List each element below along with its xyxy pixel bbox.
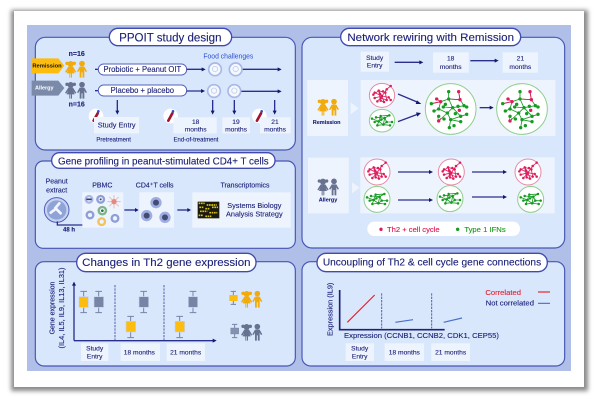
heading: Gene profiling (52, 153, 275, 168)
time point: 18 months: 18 (192, 119, 200, 126)
icon: remission children (65, 61, 87, 78)
label: 21 months (167, 343, 205, 361)
group: Remission: Remission (313, 120, 341, 126)
network legend (367, 222, 520, 236)
time point: 18 months: months (185, 127, 207, 134)
time point: 19 months (222, 117, 250, 134)
heading: food challenges: Food challenges (203, 54, 254, 61)
panel: Gene profiling (35, 153, 295, 248)
label: 21 months: 21 months (435, 350, 467, 357)
label: PBMC: PBMC (92, 182, 112, 189)
tag: Remission (32, 58, 64, 73)
network legend: Type 1 IFNs (464, 225, 506, 234)
time point: 19 months: 19 (232, 119, 240, 126)
x axis label: Expression (CCNB1, CCNB2, CDK1, CEP55) (344, 331, 499, 340)
box plots: study entry (79, 291, 104, 313)
IFN network nodes (367, 193, 541, 204)
pointer triangle (352, 182, 360, 193)
food challenge icons (208, 63, 242, 97)
IFN networks (364, 186, 544, 212)
timeline arrow: upper arm (187, 67, 282, 71)
icon: peanut extract dish (44, 198, 69, 222)
tag: Allergy (32, 81, 64, 96)
down arrows to sampling time points (115, 100, 277, 115)
arm: placebo (95, 85, 187, 96)
arm: probiotic and peanut OIT: Probiotic + Peanut OIT (103, 65, 181, 74)
converging arrows (398, 94, 421, 122)
pointer triangle (351, 102, 359, 114)
time point: 18 months (173, 117, 217, 134)
label: Peanut extract (46, 179, 68, 195)
timeline arrow: lower arm (187, 89, 282, 93)
label: 18 months (385, 343, 424, 361)
infographic content (27, 25, 571, 371)
not correlated lines (395, 318, 462, 322)
label: Study Entry: Entry (352, 354, 368, 361)
allergy network row (308, 157, 555, 236)
legend: correlated (485, 288, 550, 297)
heading: Network rewiring with Remission: Network rewiring with Remission (347, 32, 514, 44)
arrow between networks (480, 106, 494, 110)
legend: allergy (231, 324, 262, 341)
time point: 21 months (503, 52, 538, 73)
transcriptomics box (192, 192, 291, 228)
time point: 21 months: months (509, 64, 532, 71)
heading: Changes in Th2 gene expression (77, 253, 256, 272)
time point: 21 months (260, 117, 291, 134)
allergy network panel (360, 157, 555, 213)
y axis label: Gene expression (50, 281, 57, 334)
time point: 18 months (433, 52, 469, 73)
label: Peanut extract: Peanut (46, 179, 68, 186)
arm: placebo: Placebo + placebo (111, 86, 175, 95)
time point: Study Entry (361, 52, 389, 72)
CD4 T cells (139, 192, 174, 228)
sample size: remission: n=16 (69, 51, 85, 58)
time point: Study Entry: Study Entry (98, 121, 136, 130)
time point: 21 months: months (264, 127, 287, 134)
time point: Study Entry (94, 117, 139, 133)
remission network panel (361, 80, 555, 136)
label: Study Entry: Study (86, 346, 104, 353)
heading: Uncoupling (317, 253, 547, 272)
group: Allergy (308, 158, 349, 213)
network legend: Th2 + cell cycle (387, 225, 440, 234)
box plots: 21 months (175, 291, 198, 338)
arrow: 48 h: 48 h (63, 228, 75, 234)
text: Systems Biology Analysis Strategy (226, 201, 283, 219)
blue background panel (27, 25, 571, 371)
sample size: allergy: n=16 (69, 102, 85, 109)
label: End-of-treatment: End-of-treatment (174, 138, 219, 144)
time point: Study Entry: Study (366, 55, 384, 62)
label: 18 months: 18 months (124, 350, 156, 357)
time point: Study Entry: Entry (367, 63, 383, 70)
arrow to transcriptomics (177, 208, 191, 212)
heading: Network rewiring with Remission (341, 28, 521, 46)
tag: Allergy: Allergy (35, 86, 55, 92)
y axis label: (IL4, IL5, IL9, IL13, IL31) (59, 267, 66, 348)
label: Study Entry (346, 343, 374, 361)
group: Allergy: Allergy (319, 197, 338, 203)
label: Study Entry: Study (351, 346, 369, 353)
time point: 21 months: 21 (271, 119, 279, 126)
panel: Network rewiring with Remission (302, 28, 565, 248)
group: Remission (307, 80, 348, 136)
label: 18 months (121, 343, 160, 361)
PBMC cell mix (82, 192, 123, 228)
Th2 networks (364, 159, 541, 185)
label: Study Entry (81, 343, 108, 361)
label: Study Entry: Entry (87, 354, 103, 361)
period dividers (115, 285, 164, 340)
18 month network (425, 84, 476, 134)
Th2 network nodes (368, 163, 537, 179)
panel: Changes in Th2 gene expression (35, 253, 295, 366)
icon: blood sample tubes (89, 109, 267, 123)
time point: 21 months: 21 (517, 56, 524, 63)
heading: Uncoupling: Uncoupling of Th2 & cell cycle gene connections (323, 258, 541, 269)
label: 21 months: 21 months (170, 350, 202, 357)
legend: remission (229, 291, 262, 308)
21 month network (497, 84, 547, 134)
label: CD4+ T cells: CD4⁺T cells (136, 182, 174, 189)
tag: Remission: Remission (32, 64, 62, 70)
heading: PPOIT study design: PPOIT study design (119, 30, 221, 44)
text: Systems Biology Analysis Strategy: Systems Biology (227, 201, 282, 210)
label: 21 months (431, 343, 470, 361)
heading: Changes in Th2 gene expression: Changes in Th2 gene expression (82, 257, 250, 269)
arrow: 48 h (57, 221, 89, 234)
panel: PPOIT study design (32, 28, 295, 150)
period dividers (382, 293, 432, 328)
timeline arrows (395, 59, 499, 64)
panel: Uncoupling of Th2 and cell cycle gene connections (302, 253, 565, 366)
legend: correlated: Correlated (485, 288, 521, 297)
legend: not correlated: Not correlated (486, 298, 534, 307)
scatter axes (340, 290, 445, 330)
y axis label: Expression (IL9) (325, 283, 334, 336)
box plot axes (72, 282, 217, 343)
icon: heatmap (198, 202, 219, 218)
text: Systems Biology Analysis Strategy: Analysis Strategy (226, 210, 283, 219)
study entry networks (369, 83, 395, 132)
time point: 18 months: 18 (447, 56, 455, 63)
icon: allergy children (65, 82, 87, 99)
arrow to CD4 cells (124, 208, 139, 212)
y axis label (50, 267, 66, 348)
label: Pretreatment: Pretreatment (96, 138, 131, 144)
label: Peanut extract: extract (46, 188, 67, 195)
correlated line (347, 295, 375, 322)
label: Transcriptomics: Transcriptomics (220, 182, 270, 189)
label: 18 months: 18 months (389, 350, 421, 357)
time point: 18 months: months (440, 64, 462, 71)
heading: Gene profiling: Gene profiling in peanut-stimulated CD4+ T cells (58, 156, 269, 167)
time point: 19 months: months (225, 127, 248, 134)
box plots: 18 months (126, 291, 149, 338)
horizontal arrows (398, 170, 507, 202)
